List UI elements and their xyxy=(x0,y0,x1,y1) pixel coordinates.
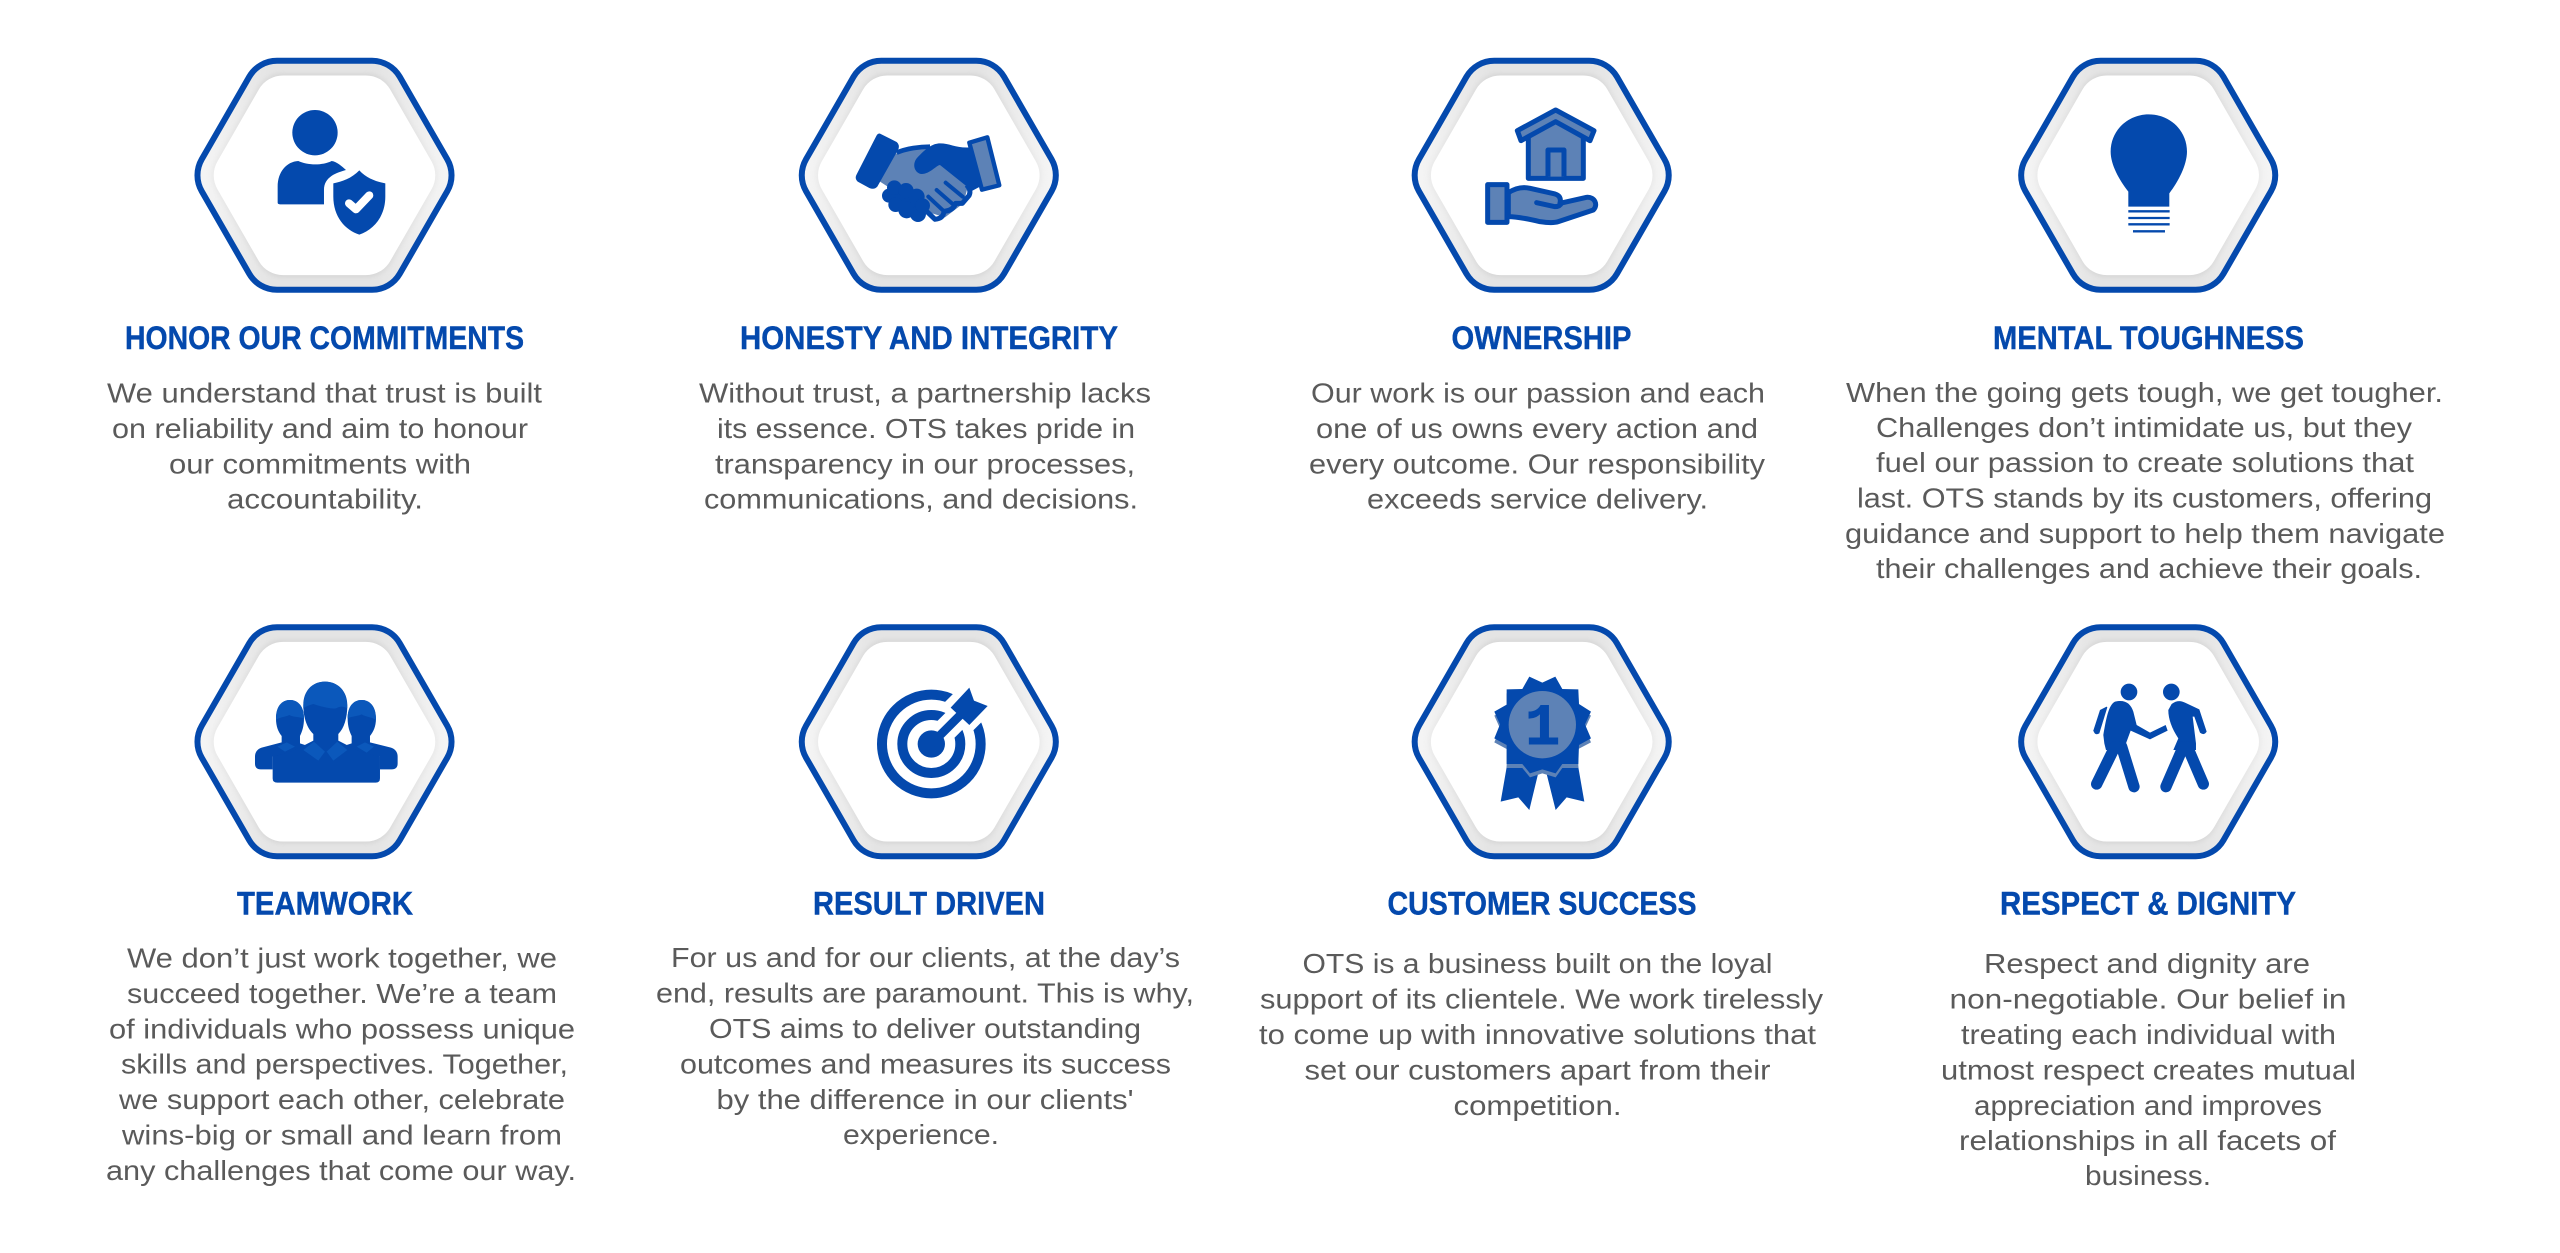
body text xyxy=(1845,377,2445,584)
body text: utmost respect creates mutual xyxy=(1941,1054,2356,1086)
hexagon frame xyxy=(197,627,452,856)
heading: RESULT DRIVEN xyxy=(813,886,1045,922)
icon: house on open hand xyxy=(1488,110,1596,223)
body text: Respect and dignity are xyxy=(1984,948,2310,979)
card: mental toughness xyxy=(1845,61,2445,584)
body text: any challenges that come our way. xyxy=(106,1155,576,1186)
body text: fuel our passion to create solutions that xyxy=(1876,447,2414,478)
body text xyxy=(1259,948,1823,1121)
body text xyxy=(107,378,542,514)
body text: we support each other, celebrate xyxy=(118,1084,565,1115)
body text: set our customers apart from their xyxy=(1304,1054,1770,1086)
body text: OTS aims to deliver outstanding xyxy=(709,1013,1141,1044)
hexagon frame xyxy=(802,61,1056,290)
card: respect and dignity xyxy=(1941,627,2356,1191)
heading: HONOR OUR COMMITMENTS xyxy=(125,320,524,356)
body text xyxy=(1309,378,1765,514)
body text: When the going gets tough, we get tougher. xyxy=(1846,377,2443,408)
body text: experience. xyxy=(843,1119,999,1150)
body text: one of us owns every action and xyxy=(1316,413,1758,444)
hexagon frame xyxy=(1415,627,1669,856)
icon: two people shaking hands xyxy=(2093,684,2207,787)
body text: transparency in our processes, xyxy=(715,448,1135,480)
card: ownership xyxy=(1309,61,1765,514)
icon: team of three people xyxy=(255,682,398,783)
body text: end, results are paramount. This is why, xyxy=(656,978,1194,1008)
body text: Our work is our passion and each xyxy=(1311,378,1765,408)
body text: succeed together. We’re a team xyxy=(127,978,557,1009)
body text: We understand that trust is built xyxy=(107,378,542,408)
body text: to come up with innovative solutions that xyxy=(1259,1019,1816,1050)
body text: last. OTS stands by its customers, offering xyxy=(1857,482,2432,514)
body text: its essence. OTS takes pride in xyxy=(717,413,1135,444)
body text: competition. xyxy=(1454,1090,1622,1121)
icon: number one rosette xyxy=(1494,677,1591,810)
body text: business. xyxy=(2085,1160,2211,1191)
heading: RESPECT & DIGNITY xyxy=(2000,886,2296,922)
body text: communications, and decisions. xyxy=(704,484,1138,514)
body text: their challenges and achieve their goals. xyxy=(1876,553,2422,584)
body text xyxy=(1941,948,2356,1191)
icon: target with arrow xyxy=(882,682,993,793)
hexagon frame xyxy=(197,61,452,290)
card: honesty and integrity xyxy=(699,61,1151,514)
heading: OWNERSHIP xyxy=(1452,320,1632,356)
number one: 1 xyxy=(1525,695,1560,762)
body text: by the difference in our clients' xyxy=(716,1084,1134,1115)
body text xyxy=(106,942,576,1186)
card: customer success xyxy=(1259,627,1823,1121)
hexagon frame xyxy=(2021,61,2275,290)
heading: CUSTOMER SUCCESS xyxy=(1388,886,1696,922)
body text: wins-big or small and learn from xyxy=(121,1120,562,1150)
body text: relationships in all facets of xyxy=(1959,1125,2336,1156)
body text: Without trust, a partnership lacks xyxy=(699,378,1151,408)
body text: guidance and support to help them navigate xyxy=(1845,518,2445,549)
body text: Challenges don’t intimidate us, but they xyxy=(1876,412,2412,443)
card: result driven xyxy=(656,627,1194,1150)
hexagon frame xyxy=(802,627,1056,856)
body text: support of its clientele. We work tirelessly xyxy=(1260,984,1823,1014)
icon: handshake xyxy=(856,134,999,222)
body text: on reliability and aim to honour xyxy=(112,413,528,444)
body text xyxy=(699,378,1151,514)
body text: our commitments with xyxy=(169,448,471,480)
body text xyxy=(656,942,1194,1150)
hexagon frame xyxy=(2021,627,2275,856)
body text: OTS is a business built on the loyal xyxy=(1302,948,1772,979)
heading: HONESTY AND INTEGRITY xyxy=(740,320,1118,356)
body text: For us and for our clients, at the day’s xyxy=(671,942,1180,973)
body text: treating each individual with xyxy=(1961,1019,2336,1050)
body text: of individuals who possess unique xyxy=(109,1014,575,1044)
body text: accountability. xyxy=(227,484,423,514)
body text: every outcome. Our responsibility xyxy=(1309,448,1765,480)
body text: appreciation and improves xyxy=(1974,1090,2322,1121)
body text: skills and perspectives. Together, xyxy=(121,1048,568,1080)
body text: non-negotiable. Our belief in xyxy=(1950,984,2346,1014)
icon: person with shield xyxy=(278,110,385,235)
hexagon frame xyxy=(1415,61,1669,290)
heading: TEAMWORK xyxy=(237,886,413,922)
heading: MENTAL TOUGHNESS xyxy=(1993,320,2304,356)
icon: light bulb xyxy=(2111,114,2187,231)
card: honor our commitments xyxy=(107,61,542,514)
body text: We don’t just work together, we xyxy=(127,942,557,974)
body text: outcomes and measures its success xyxy=(680,1048,1171,1080)
card: teamwork xyxy=(106,627,576,1186)
body text: exceeds service delivery. xyxy=(1367,484,1708,514)
